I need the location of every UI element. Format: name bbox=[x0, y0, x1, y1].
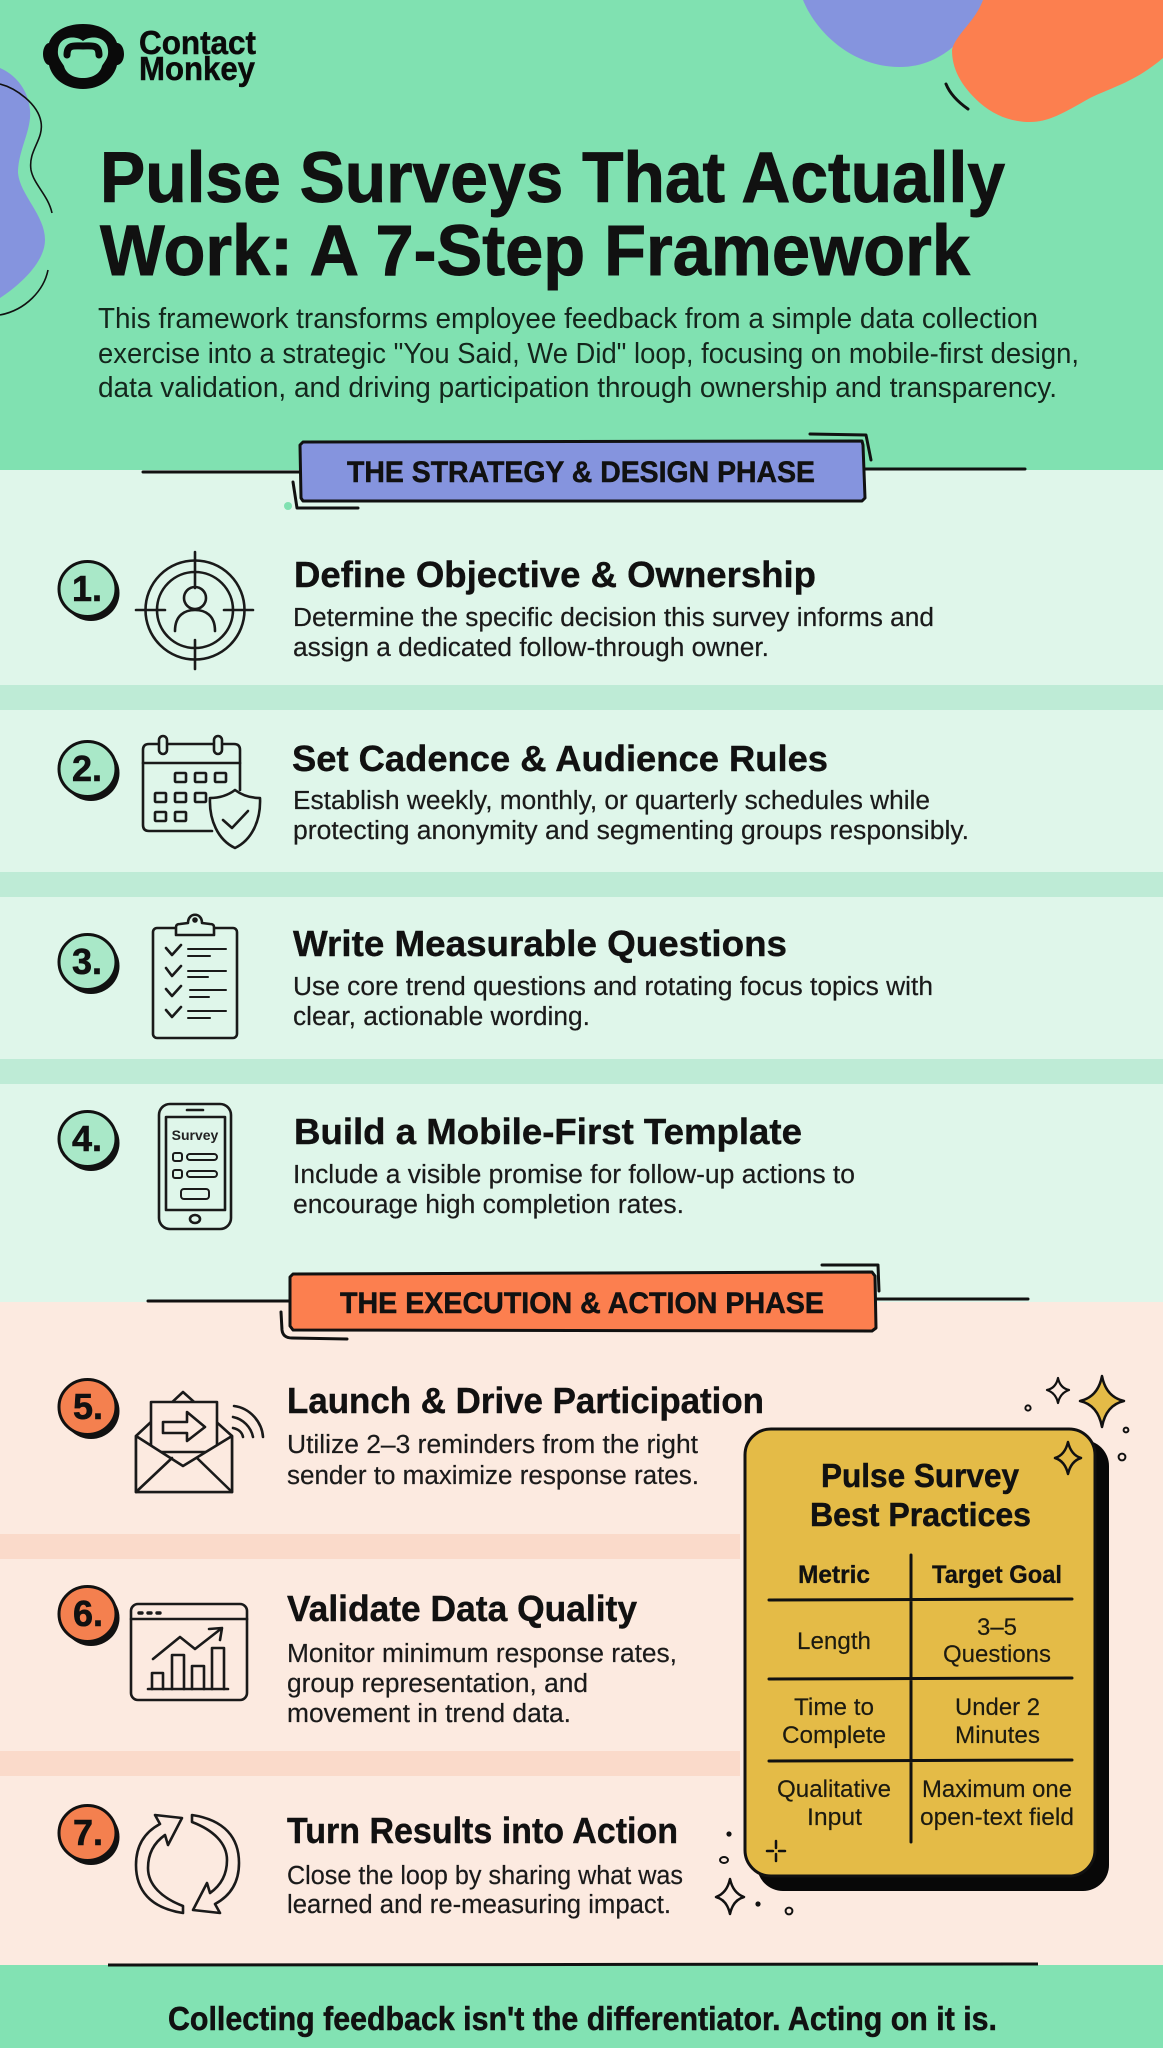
card body bbox=[745, 1429, 1095, 1876]
number badge 6 bbox=[59, 1586, 120, 1646]
step 3 bbox=[59, 915, 933, 1038]
table row: length: 3–5 bbox=[977, 1614, 1017, 1641]
logo wordmark: Monkey bbox=[139, 50, 256, 87]
number badge 4 bbox=[59, 1112, 120, 1171]
step 5 bbox=[59, 1380, 764, 1492]
icon: clipboard checklist bbox=[153, 915, 237, 1038]
table row: qualitative input bbox=[777, 1776, 1074, 1831]
card drop shadow bbox=[757, 1440, 1109, 1891]
decorative blob: left purple bbox=[0, 68, 45, 298]
icon: cycle arrows bbox=[136, 1815, 239, 1913]
step 7 description bbox=[287, 1862, 683, 1919]
step 6 description bbox=[287, 1640, 677, 1728]
icon: monkey head bbox=[43, 24, 124, 89]
number badge 3 bbox=[59, 934, 120, 994]
step 2 description bbox=[293, 787, 969, 845]
logo: ContactMonkey bbox=[43, 24, 256, 89]
step 7 description: learned and re-measuring impact. bbox=[287, 1891, 671, 1919]
number badge 1 bbox=[59, 562, 120, 621]
table row: length: Questions bbox=[943, 1641, 1051, 1668]
decorative stroke: left lower curve bbox=[0, 270, 48, 315]
step 6 heading: Validate Data Quality bbox=[287, 1588, 637, 1629]
background: execution phase peach panel bbox=[0, 1302, 1163, 1965]
number badge 1: 1. bbox=[72, 568, 102, 609]
card heading: Pulse Survey bbox=[821, 1457, 1020, 1494]
step 3 heading: Write Measurable Questions bbox=[293, 923, 787, 964]
step 4 description bbox=[293, 1161, 855, 1219]
step 7 bbox=[59, 1806, 683, 1919]
number badge 2: 2. bbox=[72, 748, 102, 789]
step 3 description: clear, actionable wording. bbox=[293, 1003, 590, 1031]
number badge 4: 4. bbox=[72, 1118, 102, 1159]
table row: qualitative input: Qualitative bbox=[777, 1776, 891, 1803]
phase banner: execution and action bbox=[148, 1265, 1028, 1339]
table row: qualitative input: Input bbox=[807, 1804, 862, 1831]
icon: calendar with shield bbox=[143, 736, 260, 848]
number badge 3: 3. bbox=[72, 941, 102, 982]
logo wordmark bbox=[139, 24, 256, 87]
step 4 bbox=[59, 1104, 855, 1229]
number badge 5 bbox=[59, 1380, 120, 1439]
number badge 2 bbox=[59, 742, 120, 801]
step 6 bbox=[59, 1586, 677, 1728]
icon: sparkle inside card top bbox=[1055, 1442, 1081, 1474]
step 7 description: Close the loop by sharing what was bbox=[287, 1862, 683, 1890]
footer rule bbox=[108, 1964, 1038, 1965]
decorative stroke: left squiggle bbox=[0, 84, 52, 213]
card heading: Best Practices bbox=[810, 1496, 1031, 1533]
number badge 6: 6. bbox=[73, 1593, 103, 1634]
table row: time to complete: Minutes bbox=[955, 1722, 1040, 1749]
step 6 description: Monitor minimum response rates, bbox=[287, 1640, 677, 1668]
step 7 heading: Turn Results into Action bbox=[287, 1810, 678, 1851]
decorative blob: top orange bbox=[952, 0, 1163, 122]
title: Pulse Surveys That Actually bbox=[100, 139, 1005, 218]
footer takeaway text: Collecting feedback isn't the differentiator. Acting on it is. bbox=[168, 2000, 997, 2037]
phase banner: strategy and design bbox=[143, 434, 1025, 510]
icon: plus sparkle inside card bottom bbox=[767, 1841, 785, 1861]
step 6 description: group representation, and bbox=[287, 1670, 588, 1698]
step 5 description: sender to maximize response rates. bbox=[287, 1462, 699, 1490]
table grid bbox=[769, 1555, 1072, 1842]
step 6 description: movement in trend data. bbox=[287, 1700, 571, 1728]
icon: mobile survey bbox=[159, 1104, 231, 1229]
logo wordmark: Contact bbox=[139, 24, 256, 61]
step 5 description: Utilize 2–3 reminders from the right bbox=[287, 1431, 698, 1459]
table row: time to complete: Complete bbox=[782, 1722, 886, 1749]
step 2 bbox=[59, 736, 969, 848]
decorative blob: top purple bbox=[803, 0, 983, 67]
step 1 description: assign a dedicated follow-through owner. bbox=[293, 634, 769, 662]
step 2 description: protecting anonymity and segmenting groups responsibly. bbox=[293, 817, 969, 845]
step 5 description bbox=[287, 1431, 699, 1490]
background: strategy phase mint panel bbox=[0, 470, 1163, 1302]
table header row: Metric bbox=[798, 1561, 870, 1589]
sparkles: bottom left of card bbox=[716, 1831, 792, 1914]
step 1 bbox=[59, 552, 934, 669]
table row: length bbox=[797, 1614, 1051, 1668]
step 4 description: Include a visible promise for follow-up actions to bbox=[293, 1161, 855, 1189]
background: footer green band bbox=[0, 1965, 1163, 2048]
table row: length: Length bbox=[797, 1628, 871, 1655]
sparkles: top right of card bbox=[1025, 1376, 1128, 1460]
table row: qualitative input: Maximum one bbox=[922, 1776, 1072, 1803]
background: header green band bbox=[0, 0, 1163, 470]
table row: qualitative input: open-text field bbox=[920, 1804, 1074, 1831]
icon: chart window bbox=[131, 1604, 247, 1700]
step 1 description bbox=[293, 604, 934, 662]
decorative stroke: top accent bbox=[946, 84, 968, 109]
step 1 description: Determine the specific decision this survey informs and bbox=[293, 604, 934, 632]
step 4 heading: Build a Mobile-First Template bbox=[294, 1111, 802, 1152]
phase banner: execution and action: THE EXECUTION & ACTION PHASE bbox=[340, 1287, 824, 1320]
panel: pulse survey best practices card bbox=[745, 1429, 1109, 1891]
step 1 heading: Define Objective & Ownership bbox=[294, 554, 816, 595]
intro text block: This framework transforms employee feedback from a simple data collection bbox=[98, 303, 1038, 335]
icon: target with person bbox=[136, 552, 253, 669]
step 4 description: encourage high completion rates. bbox=[293, 1191, 684, 1219]
icon: envelope with arrow bbox=[136, 1392, 263, 1492]
number badge 5: 5. bbox=[73, 1386, 103, 1427]
phase banner: strategy and design: THE STRATEGY & DESIGN PHASE bbox=[347, 456, 815, 489]
step 3 description: Use core trend questions and rotating focus topics with bbox=[293, 973, 933, 1001]
table row: time to complete: Under 2 bbox=[955, 1694, 1040, 1721]
step 5 heading: Launch & Drive Participation bbox=[287, 1380, 764, 1421]
card heading bbox=[810, 1457, 1031, 1533]
step 2 description: Establish weekly, monthly, or quarterly schedules while bbox=[293, 787, 930, 815]
title bbox=[100, 139, 1005, 291]
intro text block: exercise into a strategic "You Said, We Did" loop, focusing on mobile-first design, bbox=[98, 338, 1079, 370]
table row: time to complete bbox=[782, 1694, 1040, 1749]
table header row: Target Goal bbox=[932, 1561, 1062, 1589]
intro text block: data validation, and driving participation through ownership and transparency. bbox=[98, 372, 1057, 404]
title: Work: A 7-Step Framework bbox=[100, 212, 970, 291]
icon: mobile survey: Survey bbox=[172, 1127, 219, 1143]
number badge 7: 7. bbox=[73, 1812, 103, 1853]
step 3 description bbox=[293, 973, 933, 1031]
table header row bbox=[798, 1561, 1062, 1589]
table row: time to complete: Time to bbox=[794, 1694, 874, 1721]
number badge 7 bbox=[59, 1806, 120, 1865]
step 2 heading: Set Cadence & Audience Rules bbox=[292, 738, 828, 779]
intro text block bbox=[98, 303, 1079, 404]
